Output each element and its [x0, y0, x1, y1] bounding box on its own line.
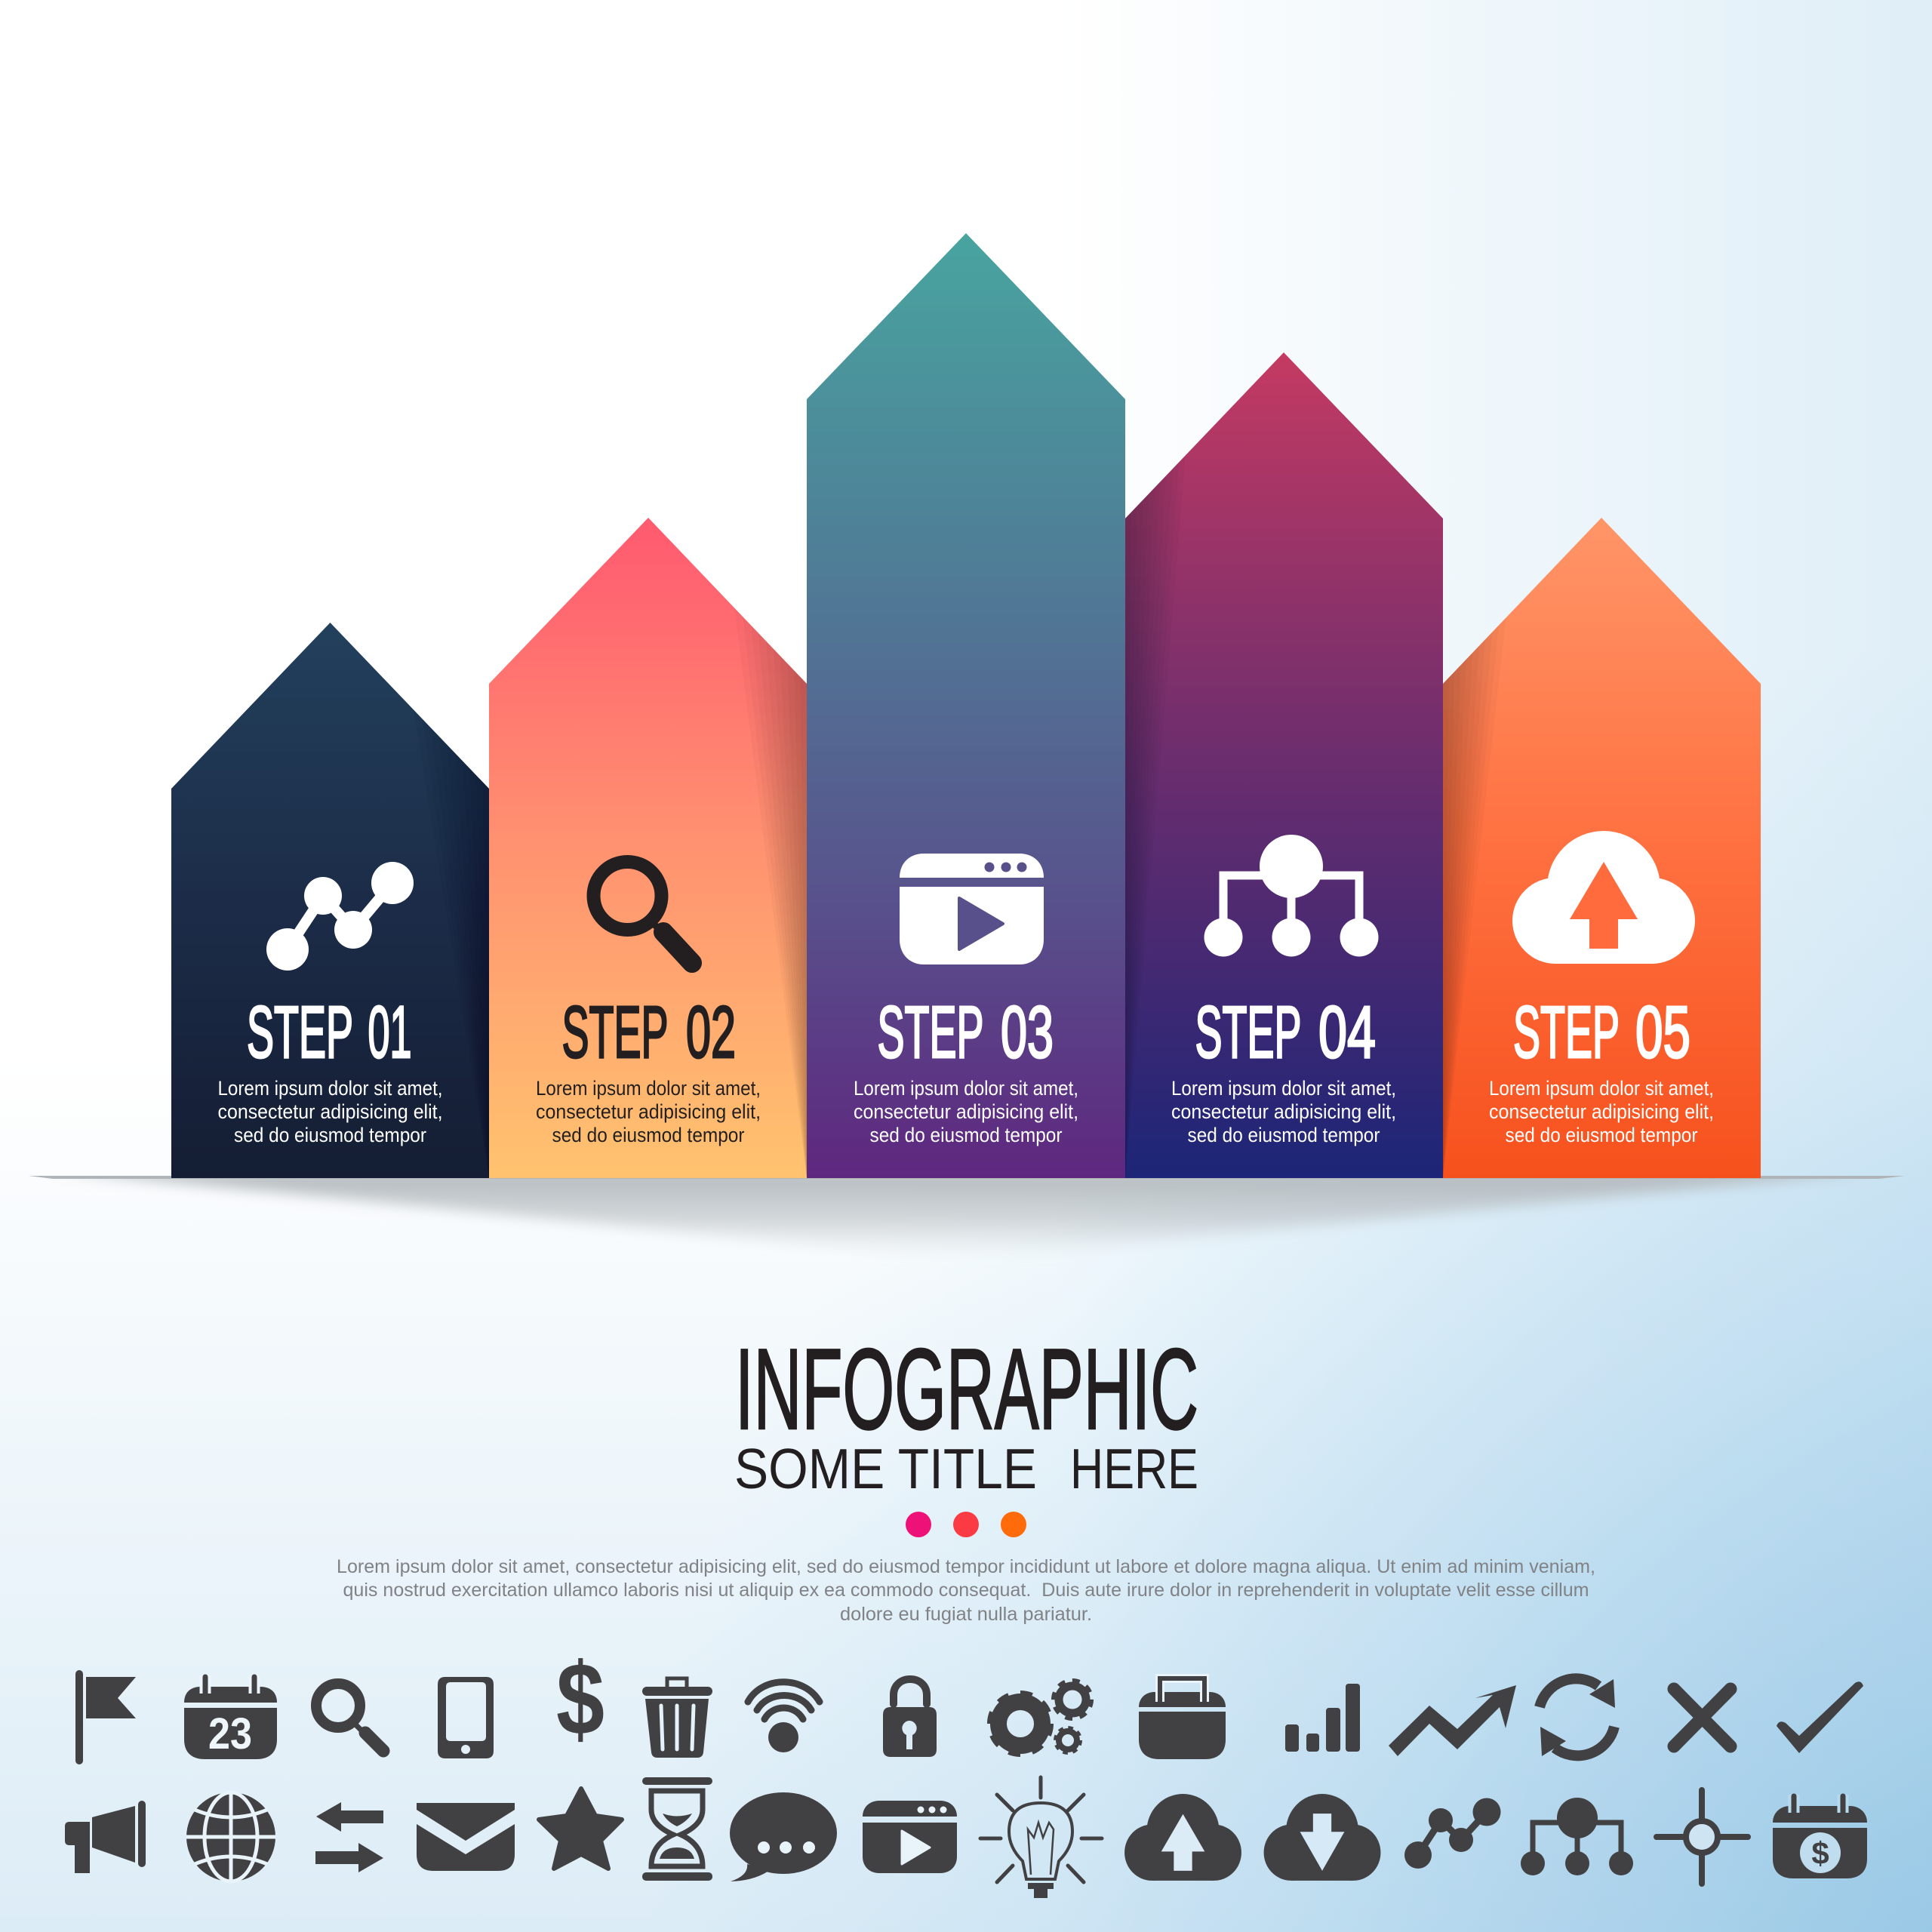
icon: megaphone [65, 1801, 146, 1873]
arrow shape 4 [1125, 352, 1443, 1178]
description: step 03: consectetur adipisicing elit, [854, 1100, 1078, 1123]
icon: network small [1521, 1798, 1633, 1875]
arrow shadow 5 [1443, 626, 1499, 1177]
description: step 05 [1489, 1077, 1714, 1146]
icon: flag [75, 1670, 136, 1764]
icon: swap arrows [315, 1802, 383, 1872]
description: step 01: Lorem ipsum dolor sit amet, [217, 1077, 442, 1100]
icon: cloud download [1264, 1794, 1380, 1881]
description: step 02: Lorem ipsum dolor sit amet, [536, 1077, 761, 1100]
icon: network [1204, 835, 1378, 957]
icon: crosshair [1657, 1790, 1748, 1884]
icon: refresh [1540, 1678, 1615, 1756]
icon: trash [642, 1678, 712, 1758]
icon: speech bubble [730, 1792, 837, 1881]
description: step 01 [217, 1077, 442, 1146]
icon: lock [883, 1679, 937, 1757]
icon: trend arrow [1389, 1685, 1516, 1756]
icon: calendar [184, 1675, 277, 1759]
description: step 04 [1171, 1077, 1396, 1146]
icon: star [539, 1789, 622, 1869]
icon: dollar: $ [556, 1641, 605, 1756]
description: step 05: Lorem ipsum dolor sit amet, [1489, 1077, 1714, 1100]
description: step 02 [536, 1077, 761, 1146]
paragraph: Lorem ipsum dolor sit amet, consectetur adipisicing elit, sed do eiusmod tempor incididunt ut labore et dolore magna aliqua. Ut enim ad minim veniam, [337, 1556, 1595, 1577]
icon: close [1674, 1689, 1730, 1746]
arrow shape 2 [489, 518, 807, 1178]
description: step 01: sed do eiusmod tempor [234, 1124, 426, 1146]
heading: step 01: 01 [368, 991, 412, 1073]
icon: magnifier small [316, 1684, 383, 1751]
icon: magnifier [593, 862, 692, 963]
icon: hourglass [642, 1777, 712, 1881]
description: step 02: sed do eiusmod tempor [552, 1124, 745, 1146]
description: step 02: consectetur adipisicing elit, [536, 1100, 761, 1123]
icon: cloud upload [1512, 831, 1695, 964]
panel: step 02 [489, 518, 807, 1178]
panel: step 05 [1443, 518, 1761, 1178]
icon: gears [992, 1681, 1091, 1752]
heading: step 04: STEP [1195, 991, 1301, 1073]
icon: phone [438, 1677, 494, 1758]
description: step 01: consectetur adipisicing elit, [217, 1100, 442, 1123]
subtitle: SOME TITLE [734, 1437, 1037, 1500]
description: step 03 [854, 1077, 1078, 1146]
icon grid [65, 1641, 1867, 1898]
description: step 05: consectetur adipisicing elit, [1489, 1100, 1714, 1123]
subtitle: HERE [1070, 1437, 1198, 1500]
icon: calendar dollar [1773, 1795, 1867, 1878]
panel: step 03 [807, 233, 1125, 1178]
icon: video player small [863, 1801, 957, 1873]
icon: envelope [417, 1803, 515, 1871]
heading: step 03: 03 [1001, 991, 1054, 1073]
heading: step 05: 05 [1635, 991, 1690, 1073]
heading: step 01: STEP [247, 991, 353, 1073]
description: step 04: Lorem ipsum dolor sit amet, [1171, 1077, 1396, 1100]
icon: line chart [266, 862, 414, 971]
heading: step 04: 04 [1318, 991, 1376, 1073]
icon: light bulb [980, 1777, 1102, 1898]
title: INFOGRAPHIC [735, 1325, 1198, 1454]
paragraph: dolore eu fugiat nulla pariatur. [840, 1604, 1092, 1625]
description: step 05: sed do eiusmod tempor [1505, 1124, 1698, 1146]
heading: step 02: STEP [561, 991, 669, 1073]
icon: calendar: 23 [208, 1709, 252, 1758]
decorative dots [906, 1512, 1026, 1537]
description: step 04: consectetur adipisicing elit, [1171, 1100, 1396, 1123]
description: step 03: sed do eiusmod tempor [869, 1124, 1063, 1146]
heading: step 05: STEP [1513, 991, 1620, 1073]
icon: briefcase [1139, 1678, 1226, 1759]
arrow shape 5 [1443, 518, 1761, 1178]
arrow shadow 1 [430, 728, 489, 1177]
icon: bar chart [1285, 1684, 1360, 1752]
icon: video player [900, 854, 1044, 964]
icon: calendar dollar: $ [1811, 1835, 1829, 1871]
arrow shape 3 [807, 233, 1125, 1178]
icon: cloud upload small [1124, 1794, 1241, 1881]
icon: check [1777, 1681, 1863, 1753]
icon: line chart small [1404, 1798, 1500, 1869]
panel: step 04 [1125, 352, 1443, 1178]
description: step 04: sed do eiusmod tempor [1188, 1124, 1380, 1146]
description: step 03: Lorem ipsum dolor sit amet, [854, 1077, 1078, 1100]
ground shadow [29, 1176, 1905, 1247]
icon: globe [186, 1792, 275, 1881]
heading: step 02: 02 [686, 991, 736, 1073]
paragraph [337, 1556, 1595, 1625]
heading: step 03: STEP [877, 991, 984, 1073]
arrow shadow 2 [743, 617, 807, 1177]
panel: step 01 [171, 623, 489, 1178]
arrow shape 1 [171, 623, 489, 1178]
paragraph: quis nostrud exercitation ullamco laboris nisi ut aliquip ex ea commodo consequat. Duis aute irure dolor in reprehenderit in voluptate velit esse cillum [343, 1580, 1589, 1601]
icon: wifi [748, 1682, 820, 1752]
arrow shadow 4 [1125, 462, 1179, 1177]
